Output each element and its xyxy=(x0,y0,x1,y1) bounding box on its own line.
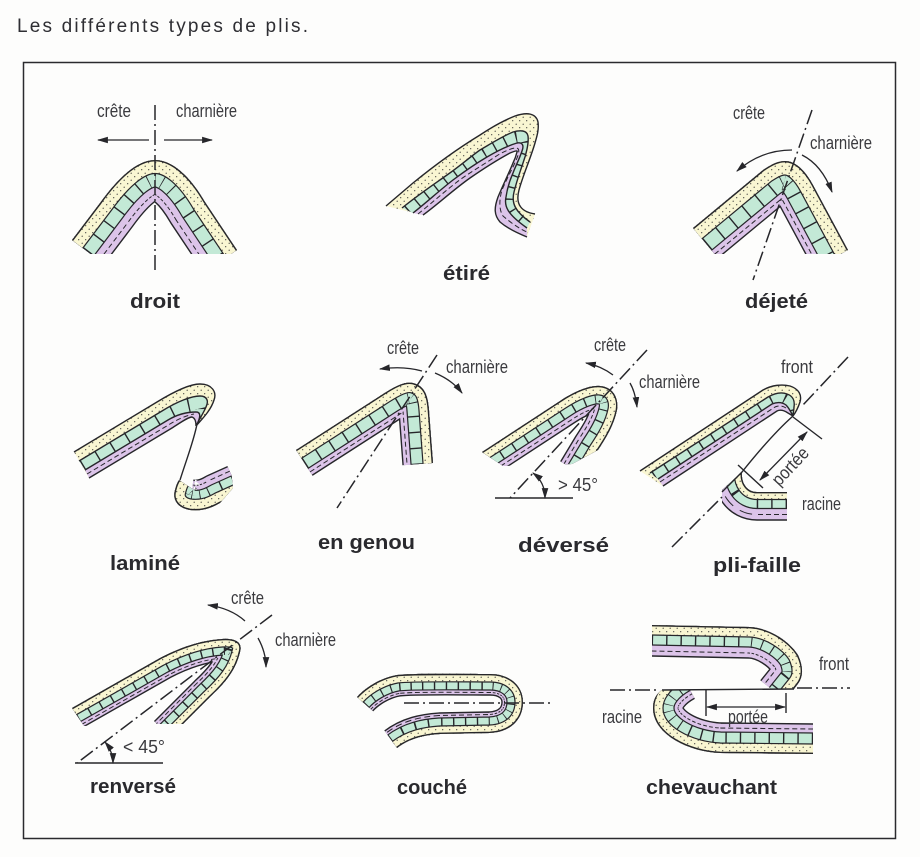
label: charnière: charnière xyxy=(446,357,508,377)
panel: pli-faille xyxy=(640,357,848,577)
layer outlines: front xyxy=(640,385,801,486)
name: couché: couché xyxy=(397,777,467,799)
panel: chevauchant xyxy=(602,625,850,799)
arrow: charnière xyxy=(802,155,832,192)
arrow: charnière xyxy=(258,638,266,667)
arrow: portée xyxy=(760,432,807,480)
angle arrows xyxy=(533,473,545,498)
title: Les différents types de plis. xyxy=(17,16,308,37)
layer outlines xyxy=(386,114,538,237)
purple layer: front xyxy=(658,403,793,486)
dashed purple line xyxy=(418,148,527,232)
label: angle: < 45° xyxy=(123,737,165,757)
axis: renversé xyxy=(77,615,272,763)
name: pli-faille: pli-faille xyxy=(713,555,801,577)
label: crête: crête xyxy=(97,101,131,121)
name: laminé: laminé xyxy=(110,553,180,575)
fold layers: en genou xyxy=(296,383,433,463)
name: en genou: en genou xyxy=(318,532,415,554)
arrow: charnière xyxy=(630,383,637,407)
label: crête: crête xyxy=(387,338,419,358)
fold layers: déjeté xyxy=(693,161,848,250)
label: charnière: charnière xyxy=(176,101,237,121)
purple layer xyxy=(413,143,527,237)
name: renversé: renversé xyxy=(90,776,176,798)
axis: lower xyxy=(672,497,722,547)
name: déjeté: déjeté xyxy=(745,291,808,313)
label: crête: crête xyxy=(231,588,264,608)
fold layers: racine xyxy=(742,472,787,492)
label: charnière: charnière xyxy=(810,133,872,153)
fold layers: front xyxy=(652,625,802,689)
angle arrows xyxy=(105,742,113,763)
label: angle: > 45° xyxy=(558,475,598,495)
fold layers: couché xyxy=(357,674,523,748)
label: portée: portée xyxy=(728,707,768,727)
axis: droit xyxy=(154,105,156,272)
panel: en genou xyxy=(296,338,508,554)
purple layer: upper limb xyxy=(85,412,200,478)
sand layer: upper limb xyxy=(74,384,215,478)
panel: laminé xyxy=(74,384,240,575)
arrow: crête xyxy=(380,368,422,371)
label: charnière: charnière xyxy=(275,630,336,650)
pinched limb line xyxy=(180,424,197,480)
axis: couché xyxy=(404,702,551,704)
arrow: charnière xyxy=(435,373,462,393)
arrow: portée xyxy=(707,706,785,708)
fold layers: droit xyxy=(72,160,237,250)
green layer xyxy=(402,131,530,228)
label: racine: racine xyxy=(802,494,841,514)
arrow: crête xyxy=(208,605,245,621)
fold layers: déversé xyxy=(482,386,617,475)
panel: couché xyxy=(357,674,551,799)
layer outlines: upper limb xyxy=(74,384,215,478)
name: chevauchant: chevauchant xyxy=(646,777,777,799)
name: étiré: étiré xyxy=(443,263,490,285)
portée ticks xyxy=(706,690,786,716)
arrow: crête xyxy=(737,150,792,171)
arrow: charnière xyxy=(164,139,212,141)
green layer: upper limb xyxy=(79,396,207,470)
fault line xyxy=(662,689,794,690)
panel: renversé xyxy=(72,588,336,798)
arrow: crête xyxy=(98,139,149,141)
green layer: front xyxy=(650,393,794,479)
label: front: front xyxy=(819,654,849,674)
horizontal reference line xyxy=(495,497,573,499)
axis: déversé xyxy=(510,350,647,498)
fold layers: racine xyxy=(653,690,813,754)
cell dividers xyxy=(408,136,528,225)
fault line and ticks xyxy=(722,416,822,492)
label: crête: crête xyxy=(733,103,765,123)
panel: droit xyxy=(72,101,237,313)
axis: right xyxy=(797,687,850,689)
fold layers: renversé xyxy=(72,638,241,726)
axis: upper xyxy=(803,357,848,405)
label: racine: racine xyxy=(602,707,642,727)
dashed purple line: front xyxy=(660,406,786,482)
label: portée: portée xyxy=(768,443,813,490)
arrow: crête xyxy=(586,363,613,375)
name: droit: droit xyxy=(130,291,180,313)
axis: déjeté xyxy=(753,110,812,280)
name: déversé: déversé xyxy=(518,535,609,557)
axis: left xyxy=(610,689,658,691)
cell dividers: front xyxy=(654,398,793,476)
panel: déjeté xyxy=(693,103,872,313)
axis: en genou xyxy=(337,355,437,508)
horizontal reference line xyxy=(75,762,163,764)
sand layer xyxy=(386,114,538,237)
fold layers: lower limb xyxy=(174,480,240,510)
label: crête: crête xyxy=(594,335,626,355)
panel: étiré xyxy=(386,114,538,285)
sand layer: front xyxy=(640,385,801,486)
cell dividers: upper limb xyxy=(82,404,204,465)
label: charnière: charnière xyxy=(639,372,700,392)
dashed purple line: upper limb xyxy=(87,414,194,474)
label: front: front xyxy=(781,357,813,377)
panel: déversé xyxy=(482,335,700,557)
